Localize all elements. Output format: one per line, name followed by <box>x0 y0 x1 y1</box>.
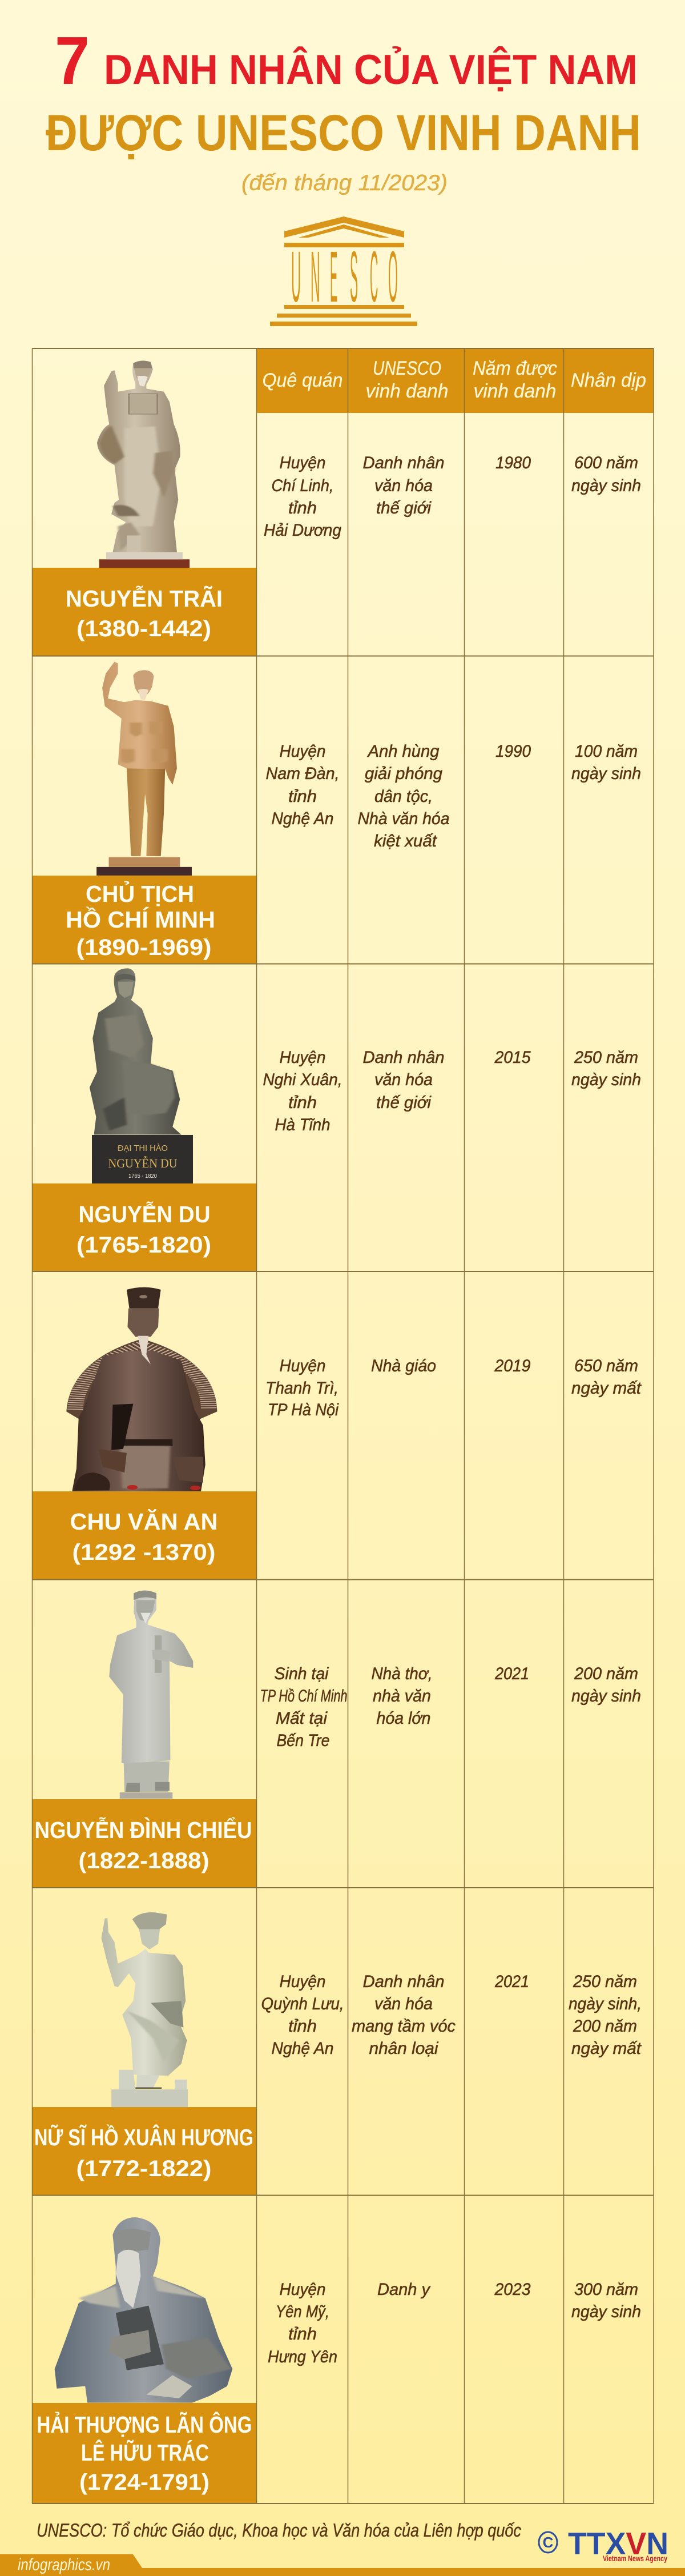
cells: ngày mất <box>571 2039 642 2058</box>
header: Năm được vinh danh <box>473 358 557 402</box>
cells: ngày sinh <box>571 476 641 495</box>
cells: 100 năm <box>575 742 638 761</box>
source label: infographics.vn <box>18 2555 110 2574</box>
name bar <box>32 1183 256 1271</box>
cells: ngày sinh, <box>569 1995 642 2013</box>
cells: Nghệ An <box>272 809 333 828</box>
cells: nhà văn <box>373 1687 431 1706</box>
cells: nhân loại <box>369 2039 439 2058</box>
name bar: (1822-1888) <box>79 1848 209 1873</box>
statue: Nguyễn Du <box>90 968 182 1134</box>
header: Nhân dịp: Nhân dịp <box>571 370 646 391</box>
statue: Nguyễn Đình Chiểu <box>109 1591 193 1799</box>
name bar: LÊ HỮU TRÁC <box>81 2439 209 2466</box>
cells: dân tộc, <box>374 787 433 806</box>
icon: UNESCO logo: S <box>350 237 358 318</box>
name bar: (1292 -1370) <box>72 1540 216 1565</box>
cells: Chí Linh, <box>272 476 333 495</box>
cells: thế giới <box>376 499 432 517</box>
cells: ngày sinh <box>571 1687 641 1706</box>
cells: 2023 <box>494 2280 531 2299</box>
cells: Danh nhân <box>363 1048 444 1067</box>
cells: ngày sinh <box>571 764 641 783</box>
cells: thế giới <box>376 1093 432 1112</box>
cells: Danh nhân <box>363 454 444 472</box>
cells <box>266 742 641 850</box>
cells <box>268 2280 641 2366</box>
cells: Nhà giáo <box>371 1357 436 1375</box>
title <box>46 23 641 195</box>
footer band with infographics.vn tab <box>0 2554 685 2576</box>
logo: TTXVN: C <box>543 2534 554 2551</box>
cells: Thanh Trì, <box>265 1379 339 1398</box>
table header <box>256 348 654 413</box>
statue plinth: NGUYỄN DU <box>108 1156 178 1170</box>
cells: văn hóa <box>374 1070 433 1089</box>
cells: Huyện <box>280 742 325 761</box>
cells: Nam Đàn, <box>266 764 339 783</box>
title line 1: DANH NHÂN CỦA VIỆT NAM <box>104 47 638 93</box>
name bar <box>32 876 256 964</box>
name bar: NGUYỄN ĐÌNH CHIỂU <box>34 1816 252 1843</box>
cells: Huyện <box>280 1357 325 1375</box>
icon: UNESCO logo: O <box>388 237 398 318</box>
panel: row 2 Hồ Chí Minh <box>32 662 641 964</box>
cells: tỉnh <box>288 2017 317 2036</box>
header: Quê quán: Quê quán <box>263 370 342 391</box>
statue: Hải Thượng Lãn Ông <box>55 2217 232 2403</box>
cells: tỉnh <box>288 787 317 806</box>
cells: 200 năm <box>574 1664 638 1683</box>
name bar <box>32 2403 256 2503</box>
cells: Huyện <box>280 454 325 472</box>
header: Năm được vinh danh: vinh danh <box>474 380 556 402</box>
icon: UNESCO logo <box>270 216 417 326</box>
name bar <box>32 1799 256 1888</box>
cells: Huyện <box>280 1972 325 1991</box>
cells: Nghệ An <box>272 2039 333 2058</box>
cells: 650 năm <box>574 1357 638 1375</box>
header: UNESCO vinh danh <box>365 358 449 402</box>
panel: row 7 Hải Thượng Lãn Ông <box>32 2217 641 2503</box>
panel: row 5 Nguyễn Đình Chiểu <box>32 1591 641 1888</box>
cells: Danh y <box>377 2280 431 2299</box>
cells: 2021 <box>494 1664 529 1683</box>
cells: văn hóa <box>374 476 433 495</box>
name bar: CHU VĂN AN <box>70 1508 218 1535</box>
name bar <box>32 568 256 656</box>
cells: Huyện <box>280 2280 325 2299</box>
header: UNESCO vinh danh: UNESCO <box>373 358 441 379</box>
cells: giải phóng <box>365 764 442 783</box>
cells: Danh nhân <box>363 1972 444 1991</box>
title number 7: 7 <box>55 23 90 99</box>
name bar: (1724-1791) <box>79 2470 209 2495</box>
statue: Hồ Xuân Hương <box>102 1912 188 2107</box>
statue: Chu Văn An <box>66 1287 217 1491</box>
icon: UNESCO logo: E <box>330 237 337 318</box>
name bar: (1765-1820) <box>76 1233 211 1258</box>
cells <box>264 454 641 540</box>
icon: UNESCO logo: U <box>291 237 301 318</box>
name bar: (1772-1822) <box>76 2156 211 2181</box>
cells: mang tầm vóc <box>352 2017 456 2036</box>
name bar: HẢI THƯỢNG LÃN ÔNG <box>37 2412 252 2438</box>
cells: 250 năm <box>574 1048 638 1067</box>
cells <box>260 1664 641 1750</box>
cells: Sinh tại <box>274 1664 329 1683</box>
cells: ngày mất <box>571 1379 642 1398</box>
cells: kiệt xuất <box>374 832 438 850</box>
name bar: NỮ SĨ HỒ XUÂN HƯƠNG <box>34 2124 253 2150</box>
cells: Hà Tĩnh <box>275 1116 330 1134</box>
icon: UNESCO logo: N <box>311 237 320 318</box>
panel: row 3 Nguyễn Du <box>32 968 641 1271</box>
cells: ngày sinh <box>571 1070 641 1089</box>
cells <box>265 1357 642 1419</box>
cells: 300 năm <box>574 2280 638 2299</box>
cells: 1990 <box>495 742 531 761</box>
cells: Huyện <box>280 1048 325 1067</box>
name bar: NGUYỄN TRÃI <box>66 585 223 612</box>
icon: UNESCO logo: C <box>370 237 378 318</box>
statue: Hồ Chí Minh <box>96 662 192 876</box>
panel: row 1 Nguyễn Trãi <box>32 360 641 656</box>
cells: Anh hùng <box>367 742 440 761</box>
cells: Nghi Xuân, <box>263 1070 342 1089</box>
statue plinth: 1765 - 1820 <box>128 1173 157 1179</box>
name bar: (1380-1442) <box>76 616 211 641</box>
cells: 600 năm <box>574 454 638 472</box>
cells: ngày sinh <box>571 2302 641 2321</box>
cells: 2015 <box>494 1048 531 1067</box>
logo: TTXVN: TTXVN <box>568 2526 668 2561</box>
name bar: NGUYỄN DU <box>79 1201 210 1227</box>
cells: TP Hồ Chí Minh <box>260 1687 347 1706</box>
cells: Hưng Yên <box>268 2348 337 2366</box>
header: UNESCO vinh danh: vinh danh <box>365 380 449 402</box>
cells: Nhà thơ, <box>371 1664 433 1683</box>
footnote: UNESCO: Tổ chức Giáo dục, Khoa học và Văn hóa của Liên hợp quốc <box>37 2520 521 2541</box>
header: Năm được vinh danh: Năm được <box>473 358 557 379</box>
name bar: (1890-1969) <box>76 935 211 960</box>
cells: 1980 <box>495 454 531 472</box>
name bar <box>32 2107 256 2195</box>
cells: Bến Tre <box>276 1731 330 1750</box>
name bar: CHỦ TỊCH <box>86 881 194 907</box>
statue: Nguyễn Trãi <box>97 360 190 568</box>
statue plinth <box>92 1135 193 1183</box>
cells: 250 năm <box>573 1972 637 1991</box>
cells: Hải Dương <box>264 521 341 540</box>
cells: 2021 <box>494 1972 529 1991</box>
cells: tỉnh <box>288 2325 317 2344</box>
cells: 200 năm <box>573 2017 637 2036</box>
subtitle: (đến tháng 11/2023) <box>241 171 448 195</box>
cells: TP Hà Nội <box>268 1401 339 1419</box>
cells: 2019 <box>494 1357 531 1375</box>
name bar: HỒ CHÍ MINH <box>66 906 215 933</box>
cells: tỉnh <box>288 1093 317 1112</box>
cells: Nhà văn hóa <box>357 809 450 828</box>
cells: hóa lớn <box>377 1709 430 1728</box>
name bar <box>32 1491 256 1579</box>
cells: tỉnh <box>288 499 317 517</box>
cells: Mất tại <box>276 1709 328 1728</box>
cells: văn hóa <box>374 1995 433 2013</box>
cells: Quỳnh Lưu, <box>261 1995 344 2013</box>
cells <box>263 1048 641 1134</box>
statue plinth: ĐẠI THI HÀO <box>118 1143 168 1153</box>
cells: Yên Mỹ, <box>276 2302 329 2321</box>
panel: row 4 Chu Văn An <box>32 1287 642 1579</box>
cells <box>261 1972 642 2058</box>
panel: row 6 Hồ Xuân Hương <box>32 1912 642 2195</box>
